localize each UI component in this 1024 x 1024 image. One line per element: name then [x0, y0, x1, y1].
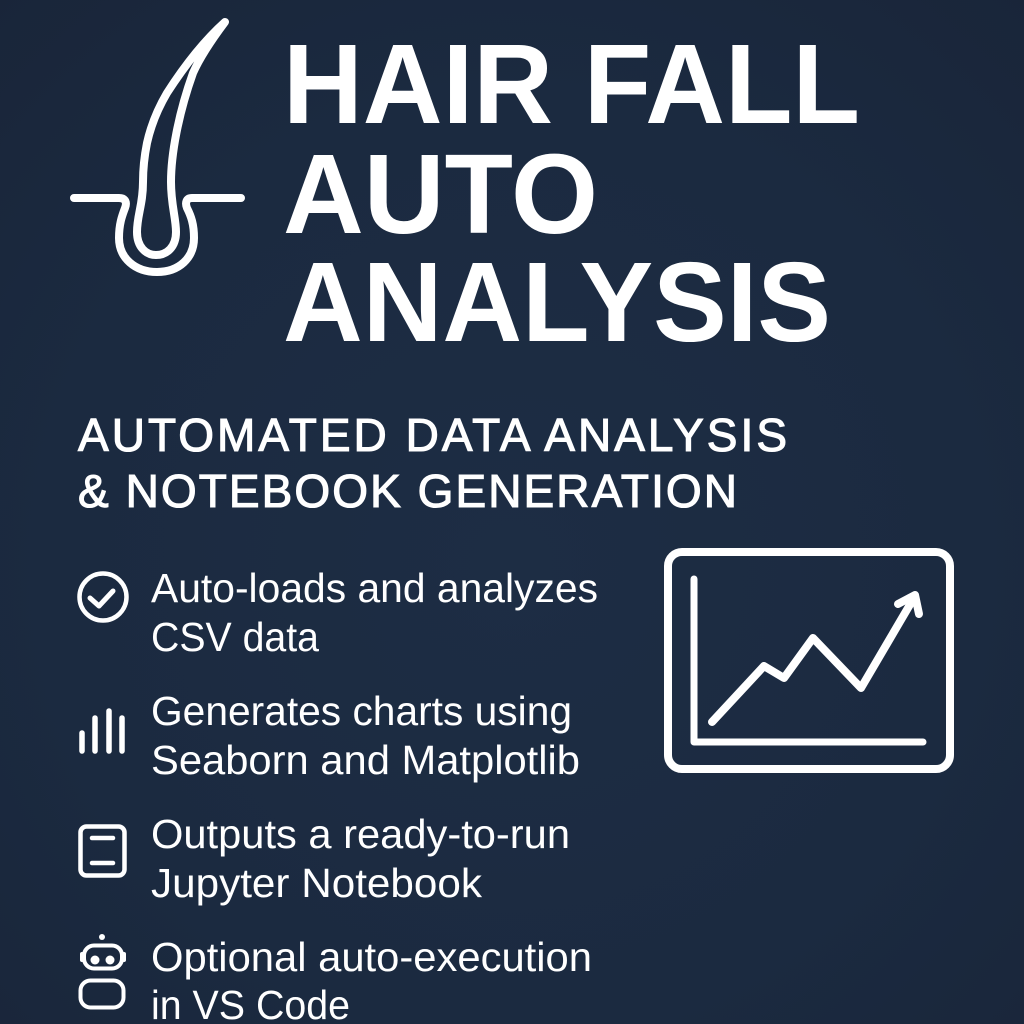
subtitle: & NOTEBOOK GENERATION — [78, 465, 737, 517]
subtitle — [78, 409, 787, 517]
bullet: auto-load text: Auto-loads and analyzes — [151, 565, 598, 611]
bullet: auto-load text: CSV data — [151, 614, 319, 660]
bullet: notebook text: Outputs a ready-to-run — [151, 811, 570, 857]
bullet: notebook text: Jupyter Notebook — [151, 860, 483, 906]
bullet: auto-load text — [151, 565, 598, 660]
subtitle: AUTOMATED DATA ANALYSIS — [78, 409, 787, 461]
bullet: charts text — [151, 688, 580, 783]
icon: check circle — [80, 574, 126, 620]
bullet: charts text: Generates charts using — [151, 688, 572, 734]
bullet: execution text: Optional auto-execution — [151, 934, 592, 980]
title: AUTO — [283, 131, 598, 257]
chart icon: trend line in frame — [668, 552, 950, 769]
title: ANALYSIS — [283, 239, 831, 365]
icon: hair follicle — [74, 22, 241, 272]
icon: notebook — [80, 826, 124, 876]
bullet: charts text: Seaborn and Matplotlib — [151, 737, 580, 783]
bullet: notebook text — [151, 811, 570, 906]
icon: bars — [82, 711, 122, 751]
title — [283, 21, 860, 365]
icon: robot — [80, 934, 124, 1008]
bullet: execution text — [151, 934, 592, 1024]
title: HAIR FALL — [283, 21, 860, 147]
